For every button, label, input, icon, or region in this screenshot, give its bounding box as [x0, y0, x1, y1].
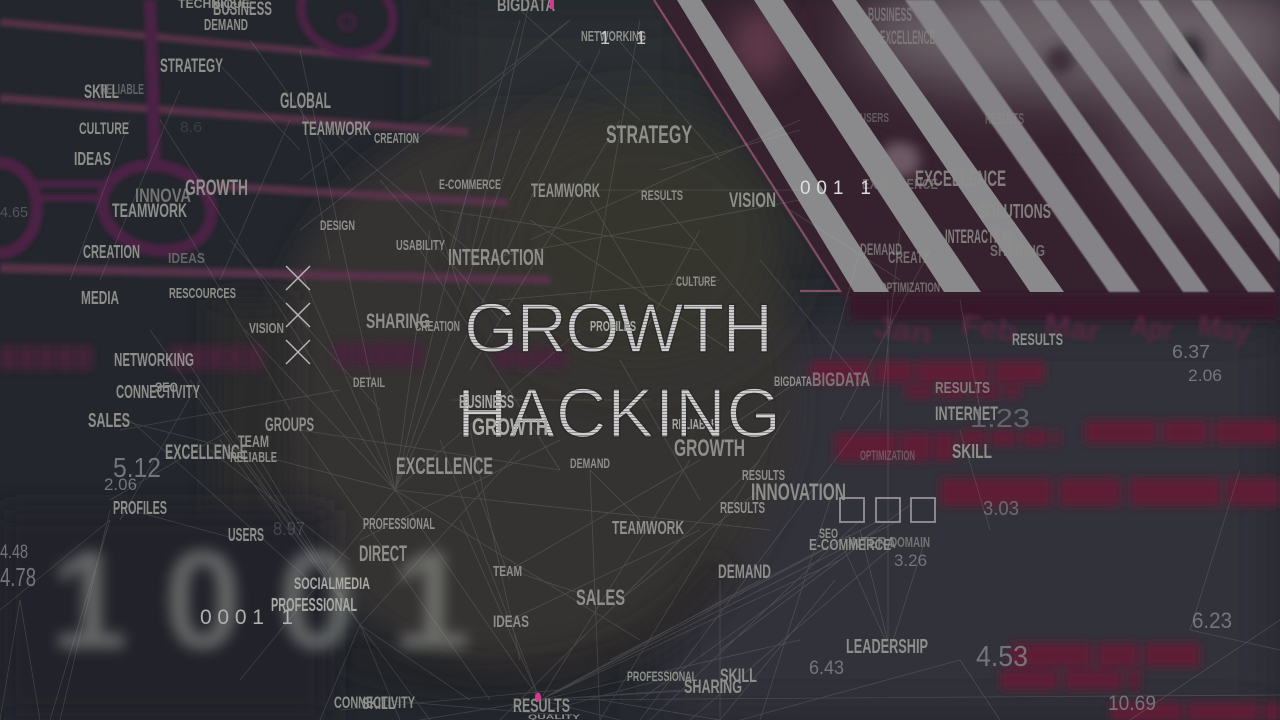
word cloud: centre: TEAMWORK — [612, 518, 684, 538]
word cloud: middle right: BIGDATA — [774, 373, 812, 389]
word cloud: middle left: DETAIL — [353, 374, 385, 390]
numeric readouts: 3.03 — [983, 498, 1019, 520]
word cloud: centre: IDEAS — [493, 612, 529, 631]
title: growth hacking: HACKING — [457, 374, 781, 452]
word cloud: middle right: SKILL — [952, 441, 992, 463]
icon: three crosses — [286, 266, 310, 364]
word cloud: top left: CREATION — [83, 242, 140, 262]
title: growth hacking — [457, 289, 781, 452]
overlapping words on title — [459, 318, 636, 441]
word cloud: top left: TEAMWORK — [302, 119, 371, 140]
word cloud: top centre: TEAMWORK — [531, 181, 600, 202]
numeric readouts: 6.23 — [1192, 608, 1232, 633]
word cloud: middle left: CONNECTIVITY — [116, 382, 200, 402]
word cloud: top right: EXCELLENCE — [915, 166, 1006, 191]
word cloud: centre: DEMAND — [570, 455, 610, 471]
numeric readouts: 4.53 — [976, 641, 1028, 673]
word cloud: top right: USERS — [860, 110, 889, 125]
word cloud: middle right: INTERNET — [935, 404, 998, 425]
word cloud: top right: SHARING — [990, 243, 1045, 260]
word cloud: centre: SALES — [576, 585, 625, 610]
month labels: Feb — [959, 309, 1019, 349]
numeric readouts: 1.23 — [970, 403, 1030, 433]
word cloud: top left: SKILL — [84, 82, 119, 103]
word cloud: top centre: INTERACTION — [448, 244, 544, 270]
word cloud: middle right — [672, 370, 998, 658]
month labels: Mar — [1042, 309, 1102, 349]
word cloud: top centre — [320, 0, 776, 335]
numeric readouts: 4.78 — [0, 562, 36, 592]
word cloud: top right — [860, 5, 1063, 349]
word cloud: middle left: TEAM — [238, 432, 269, 451]
word cloud: middle left: NETWORKING — [114, 350, 194, 370]
word cloud: centre: TEAM — [493, 563, 522, 580]
word cloud: top left: MEDIA — [81, 288, 119, 308]
chart stripes — [677, 0, 1280, 292]
binary readouts: 1 1 — [600, 28, 646, 48]
word cloud: middle left: PROFILES — [113, 498, 167, 518]
word cloud: middle left: EXCELLENCE — [165, 441, 248, 464]
numeric readouts — [0, 119, 1232, 715]
word cloud: top centre: VISION — [729, 189, 776, 212]
word cloud: top left: CREATION — [374, 130, 419, 147]
word cloud: top left: DEMAND — [204, 17, 248, 34]
word cloud: middle left: GROUPS — [265, 415, 314, 436]
numeric readouts: 6.43 — [809, 658, 844, 679]
month labels: Jan — [872, 311, 934, 351]
numeric readouts: 2.06 — [104, 475, 137, 494]
word cloud: middle left — [88, 350, 435, 615]
magenta nodes — [535, 0, 554, 702]
word cloud: top left: INNOVA — [135, 186, 191, 207]
binary readouts — [200, 28, 871, 629]
numeric readouts: 5.12 — [113, 452, 161, 483]
numeric readouts: 8.97 — [273, 519, 305, 539]
chart bracket line — [654, 0, 840, 291]
word cloud: centre: SHARING — [684, 677, 742, 698]
word cloud: middle right: RELIABLE — [672, 416, 717, 433]
word cloud: middle right: GROWTH — [674, 435, 745, 462]
word cloud: top right: CREATE — [888, 248, 930, 267]
word cloud: middle right: RESULTS — [720, 500, 765, 517]
word cloud: top left: RESCOURCES — [169, 285, 236, 302]
word cloud: middle left: SOCIALMEDIA — [294, 574, 370, 593]
word cloud: top centre: STRATEGY — [606, 121, 692, 149]
word cloud: top right: INTERACTION — [945, 227, 1011, 248]
word cloud: top right: EXCELLENCE — [862, 176, 938, 193]
word cloud: centre: RESULTS — [513, 696, 570, 717]
word cloud: centre: EXCELLENCE — [396, 453, 493, 480]
word cloud: middle right: E-COMMERCE — [809, 537, 891, 554]
word cloud: top right: OPTIMIZATION — [880, 279, 940, 295]
word cloud: middle right: INNOVATION — [751, 479, 846, 506]
word cloud: centre — [334, 453, 771, 720]
word cloud: top right: BUSINESS — [868, 5, 912, 26]
word cloud: top centre: E-COMMERCE — [439, 176, 501, 192]
numeric readouts: 4.65 — [0, 204, 28, 221]
word cloud: top centre: CREATION — [415, 318, 460, 335]
word cloud: top centre: USABILITY — [396, 237, 445, 254]
month labels: May — [1196, 310, 1252, 349]
overlapping words on title: PROFILES — [590, 318, 636, 335]
numeric readouts: 3.26 — [894, 551, 927, 570]
word cloud: middle right: RESULTS — [742, 467, 785, 484]
numeric readouts: 2.06 — [1188, 366, 1222, 385]
month labels: Apr — [1129, 310, 1175, 348]
big blurred binary 1001: 1001 — [50, 521, 470, 678]
word cloud: top left: VISION — [249, 320, 284, 337]
word cloud: top centre: NETWORKING — [581, 28, 646, 45]
word cloud: top left: RELIABLE — [100, 81, 144, 98]
word cloud: centre: CONNECTIVITY — [334, 693, 415, 712]
word cloud: centre: SKILL — [362, 694, 395, 713]
word cloud: centre: DEMAND — [718, 562, 771, 583]
panel: blurred striped chart background — [650, 0, 1280, 320]
word cloud: middle left: DIRECT — [359, 541, 407, 566]
word cloud: middle left: USERS — [228, 525, 264, 545]
numeric readouts: 6.37 — [1172, 342, 1210, 362]
word cloud: middle right: OPTIMIZATION — [860, 447, 915, 463]
month labels — [872, 309, 1252, 351]
blurred magenta row — [0, 355, 565, 358]
word cloud: top left: TEAMWORK — [112, 201, 187, 222]
word cloud: top right: EXCELLENCE — [880, 28, 935, 49]
word cloud: middle right: BIGDATA — [812, 370, 870, 391]
word cloud: top centre: SHARING — [366, 310, 430, 333]
binary readouts: 0001 1 — [200, 606, 293, 629]
numeric readouts: 8.6 — [180, 119, 202, 136]
overlapping words on title: GROWTH — [472, 414, 548, 441]
word cloud: middle right: LEADERSHIP — [846, 636, 928, 658]
word cloud: top left: CULTURE — [79, 119, 129, 138]
icon: three squares — [840, 498, 935, 522]
word cloud: middle left: PROFESSIONAL — [271, 595, 357, 615]
word cloud: top centre: RESULTS — [641, 187, 683, 203]
word cloud: middle right: DOMAIN — [890, 534, 930, 551]
title: growth hacking: GROWTH — [464, 289, 773, 367]
word cloud: top centre: DESIGN — [320, 217, 355, 233]
word cloud: top left: GROWTH — [185, 175, 248, 200]
word cloud: middle left: RELIABLE — [230, 449, 277, 466]
word cloud: middle left: PROFESSIONAL — [363, 516, 435, 533]
word cloud: top right: RESULTS — [985, 111, 1024, 128]
word cloud: top right: DEMAND — [860, 240, 902, 259]
word cloud: centre: PROFESSIONAL — [627, 668, 697, 684]
word cloud: top right: RESULTS — [1012, 330, 1063, 349]
word cloud: middle right: RESULTS — [935, 380, 990, 397]
numeric readouts: 4.48 — [0, 542, 28, 563]
word cloud: top left: IDEAS — [74, 149, 111, 169]
word cloud: top left — [74, 0, 419, 337]
word cloud: top left: GLOBAL — [280, 88, 331, 113]
magenta circuit diagram — [0, 0, 550, 280]
word cloud: top left: IDEAS — [168, 250, 205, 267]
word cloud: middle right: SEO — [819, 525, 838, 541]
word cloud: middle left: SEO — [155, 379, 178, 395]
word cloud: middle left: SALES — [88, 410, 130, 432]
binary readouts: 001 1 — [800, 178, 871, 199]
word cloud: middle right: INTERA — [848, 535, 896, 552]
overlapping words on title: BUSINESS — [459, 392, 514, 412]
word cloud: top right: SOLUTIONS — [978, 201, 1051, 223]
word cloud: top left: STRATEGY — [160, 56, 223, 77]
word cloud: centre: SKILL — [720, 666, 757, 687]
word cloud: top centre: CULTURE — [676, 273, 716, 289]
numeric readouts: 10.69 — [1108, 692, 1156, 715]
blurred red data rows — [810, 372, 1280, 712]
